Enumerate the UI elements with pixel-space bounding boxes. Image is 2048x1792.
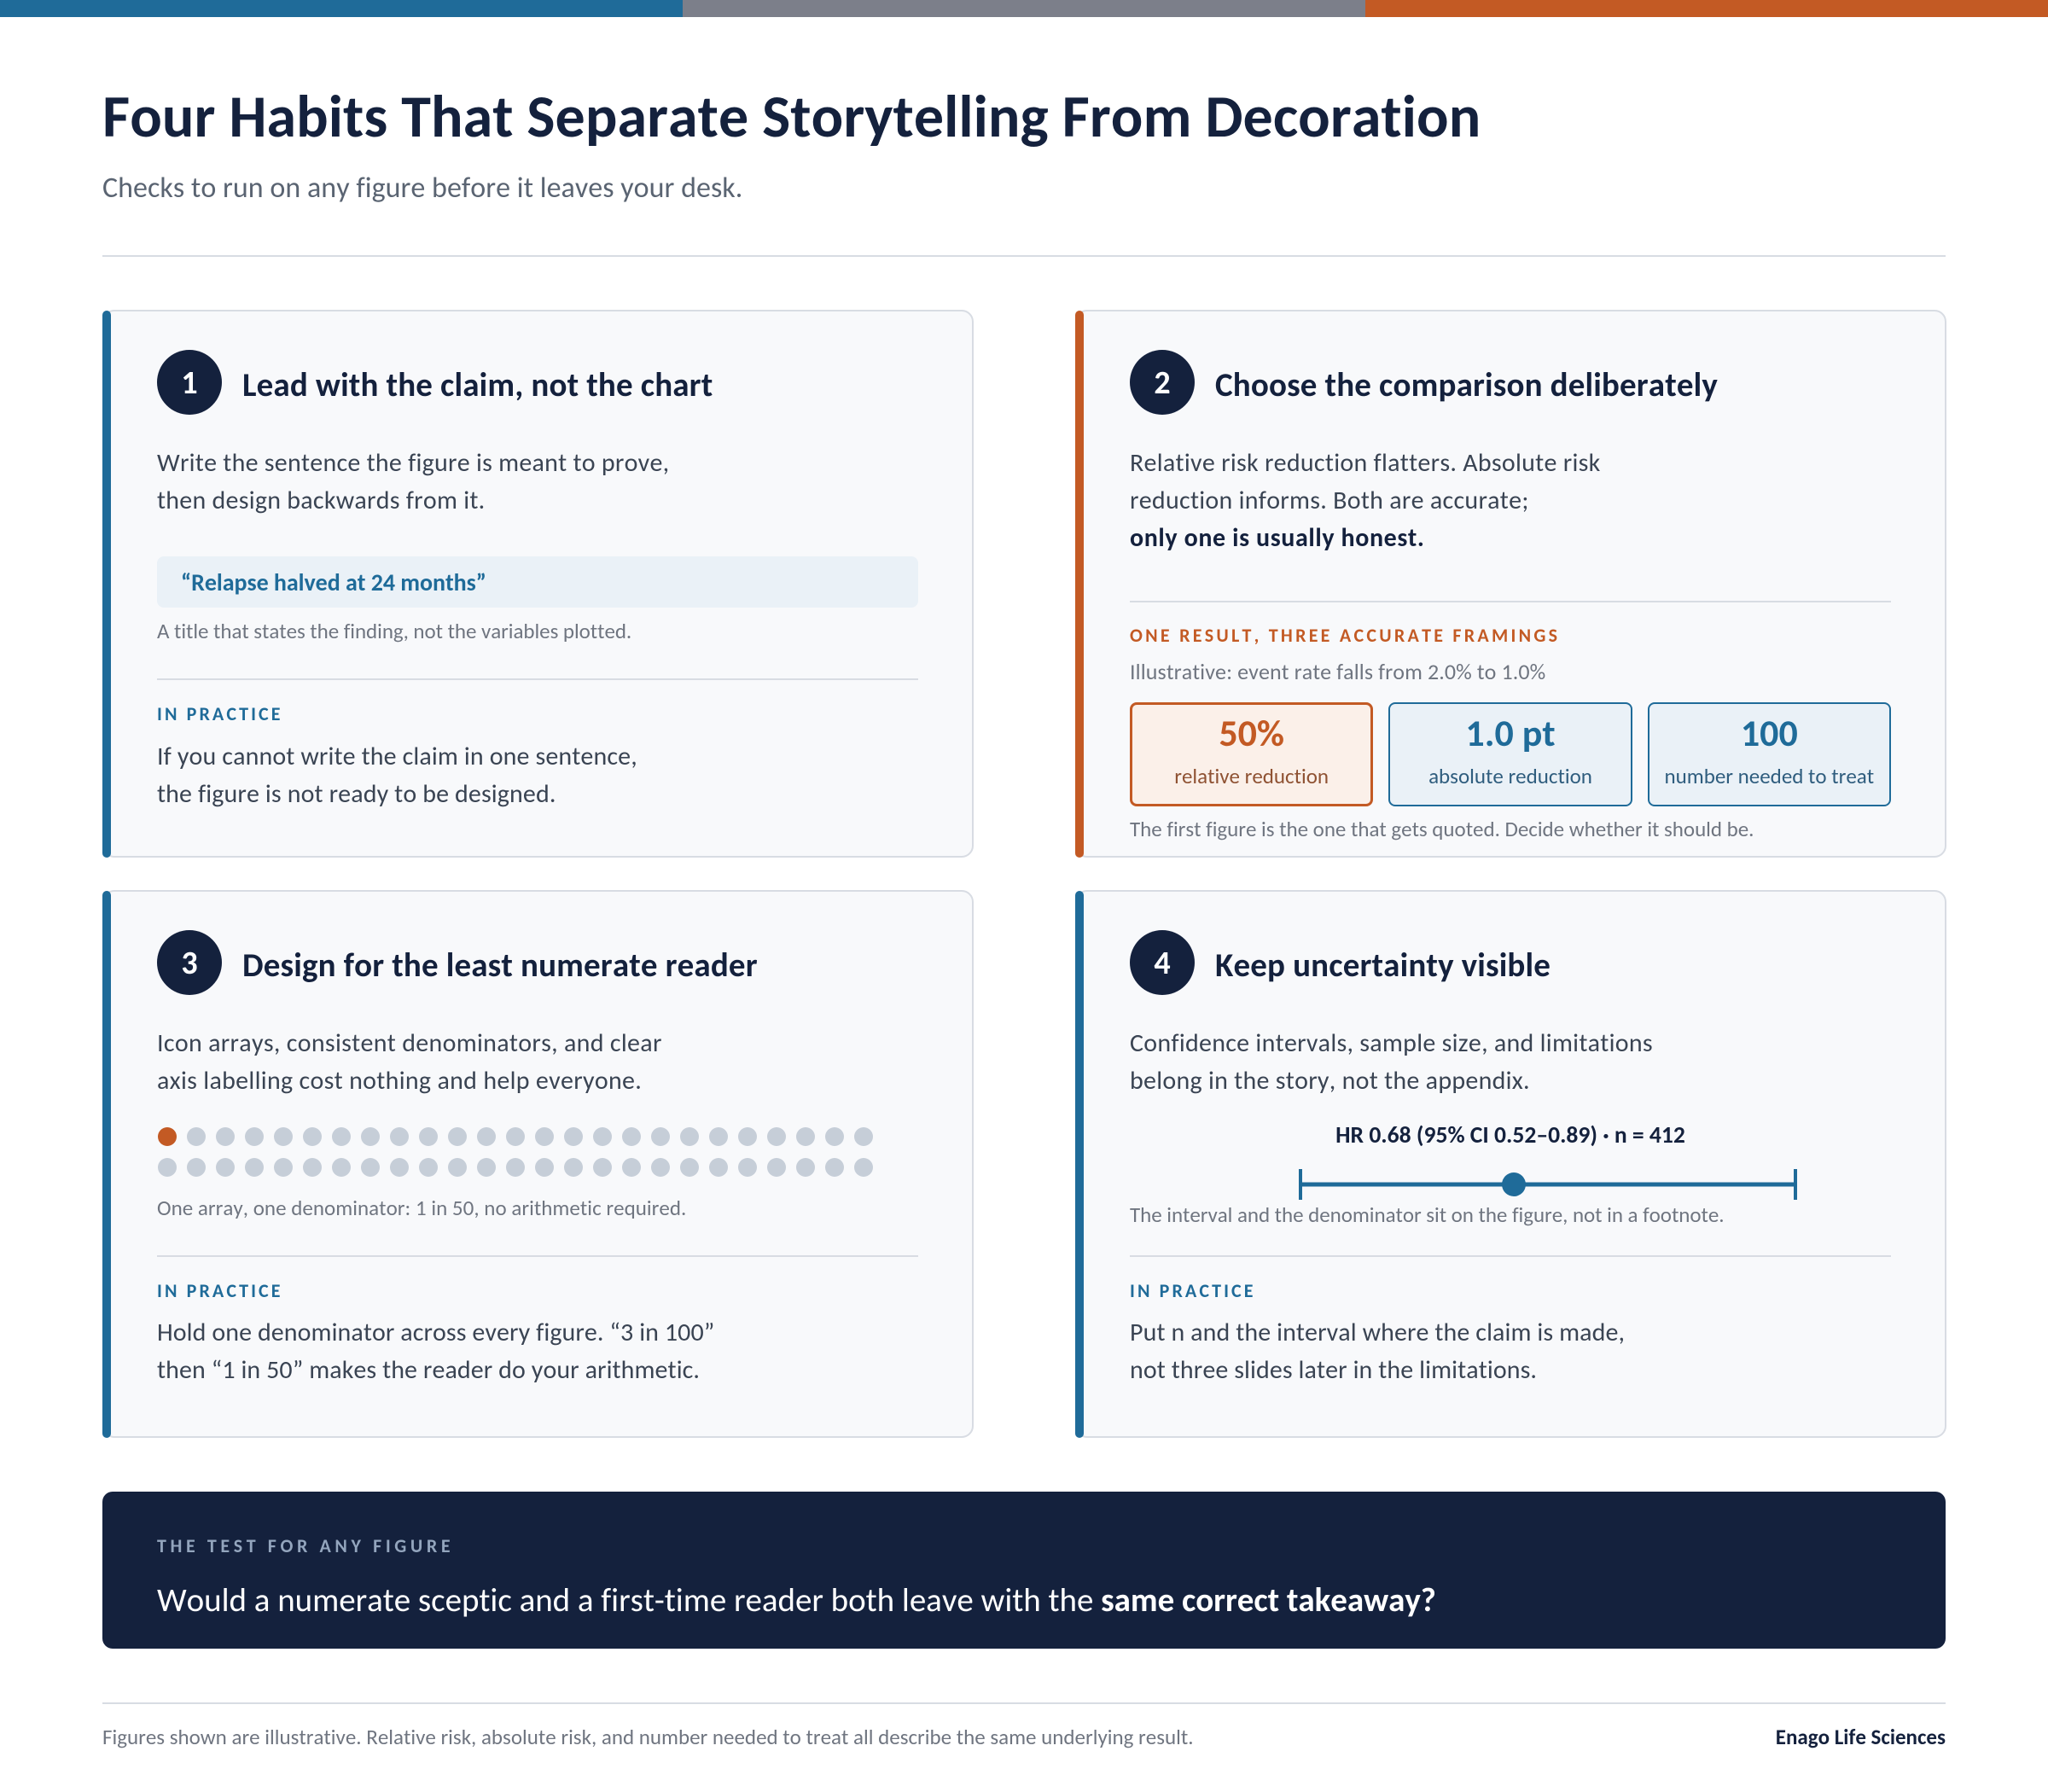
stat: 100 number needed to treat xyxy=(1648,702,1891,806)
text: in practice advice: Hold one denominator across every figure. “3 in 100” xyxy=(157,1317,714,1348)
heading: habit 1: Lead with the claim, not the chart xyxy=(242,365,713,405)
label: hazard ratio: HR 0.68 (95% CI 0.52–0.89) · n = 412 xyxy=(1335,1121,1685,1149)
banner: the test for any figure xyxy=(102,1492,1946,1649)
stat: 100 number needed to treat: number needed to treat xyxy=(1664,763,1874,789)
caption: illustrative rates: Illustrative: event rate falls from 2.0% to 1.0% xyxy=(1130,658,1545,685)
text: habit 1 description: Write the sentence the figure is meant to prove, xyxy=(157,447,669,479)
badge: 2 xyxy=(1130,350,1195,415)
text: habit 1 description: then design backwards from it. xyxy=(157,485,485,516)
text: habit 2 description xyxy=(1130,447,1601,554)
label: in practice: IN PRACTICE xyxy=(157,702,283,725)
badge: 4: 4 xyxy=(1154,944,1171,983)
badge: 3 xyxy=(157,930,222,995)
text: habit 4 description: Confidence intervals, sample size, and limitations xyxy=(1130,1027,1653,1059)
caption: interval note: The interval and the denominator sit on the figure, not in a footnote. xyxy=(1130,1201,1725,1228)
caption: framing note: The first figure is the one that gets quoted. Decide whether it should be. xyxy=(1130,816,1754,842)
stat: 1.0 pt absolute reduction: 1.0 pt xyxy=(1465,710,1556,756)
heading: habit 4: Keep uncertainty visible xyxy=(1215,945,1551,986)
label: framings: ONE RESULT, THREE ACCURATE FRAMINGS xyxy=(1130,624,1560,647)
text: habit 1 description xyxy=(157,447,669,516)
panel: habit 1 xyxy=(102,310,974,858)
label: in practice: IN PRACTICE xyxy=(157,1279,283,1302)
heading: habit 3: Design for the least numerate reader xyxy=(242,945,758,986)
label: in practice: IN PRACTICE xyxy=(1130,1279,1256,1302)
panel: habit 3 xyxy=(102,890,974,1438)
icon array: 1 in 50 xyxy=(158,1127,873,1177)
callout: example title: “Relapse halved at 24 months” xyxy=(181,567,486,597)
text: in practice advice xyxy=(157,1317,714,1386)
stat: 50% relative reduction: relative reduction xyxy=(1174,763,1329,789)
callout: example title xyxy=(157,556,918,608)
text: in practice advice xyxy=(157,741,637,810)
caption: callout note: A title that states the finding, not the variables plotted. xyxy=(157,618,631,644)
stat: 50% relative reduction: 50% xyxy=(1219,710,1284,756)
text: habit 2 description: only one is usually honest. xyxy=(1130,522,1425,554)
text: habit 2 description: reduction informs. Both are accurate; xyxy=(1130,485,1529,516)
chart: confidence interval xyxy=(1299,1169,1797,1200)
footer note: Figures shown are illustrative. Relative risk, absolute risk, and number needed to treat all describe the same underlying result. xyxy=(102,1724,1194,1750)
text: habit 3 description: Icon arrays, consistent denominators, and clear xyxy=(157,1027,662,1059)
text: in practice advice: If you cannot write the claim in one sentence, xyxy=(157,741,637,772)
text: in practice advice: not three slides later in the limitations. xyxy=(1130,1354,1537,1386)
banner question: Would a numerate sceptic and a first-time reader both leave with the same correct takeaway? xyxy=(157,1580,1436,1620)
badge: 4 xyxy=(1130,930,1195,995)
banner label: THE TEST FOR ANY FIGURE xyxy=(157,1534,454,1557)
badge: 1 xyxy=(157,350,222,415)
panel: habit 2 xyxy=(1075,310,1946,858)
stat: 100 number needed to treat: 100 xyxy=(1741,710,1798,756)
badge: 1: 1 xyxy=(181,364,198,403)
stat: 1.0 pt absolute reduction xyxy=(1388,702,1632,806)
text: in practice advice: then “1 in 50” makes the reader do your arithmetic. xyxy=(157,1354,700,1386)
text: in practice advice: the figure is not ready to be designed. xyxy=(157,778,556,810)
text: habit 3 description xyxy=(157,1027,662,1097)
badge: 3: 3 xyxy=(181,944,198,983)
footer credit: Enago Life Sciences xyxy=(1776,1724,1946,1750)
text: habit 3 description: axis labelling cost nothing and help everyone. xyxy=(157,1065,642,1097)
text: habit 2 description: Relative risk reduction flatters. Absolute risk xyxy=(1130,447,1601,479)
text: habit 4 description xyxy=(1130,1027,1653,1097)
heading: habit 2: Choose the comparison deliberately xyxy=(1215,365,1718,405)
badge: 2: 2 xyxy=(1154,364,1171,403)
subtitle: Checks to run on any figure before it leaves your desk. xyxy=(102,171,742,206)
caption: array note: One array, one denominator: 1 in 50, no arithmetic required. xyxy=(157,1195,686,1221)
top colour bar xyxy=(0,0,2048,17)
title: Four Habits That Separate Storytelling From Decoration xyxy=(102,79,1481,153)
text: in practice advice xyxy=(1130,1317,1625,1386)
stat: 50% relative reduction xyxy=(1130,702,1373,806)
text: habit 4 description: belong in the story, not the appendix. xyxy=(1130,1065,1530,1097)
text: in practice advice: Put n and the interval where the claim is made, xyxy=(1130,1317,1625,1348)
panel: habit 4 xyxy=(1075,890,1946,1438)
stat: 1.0 pt absolute reduction: absolute reduction xyxy=(1428,763,1592,789)
